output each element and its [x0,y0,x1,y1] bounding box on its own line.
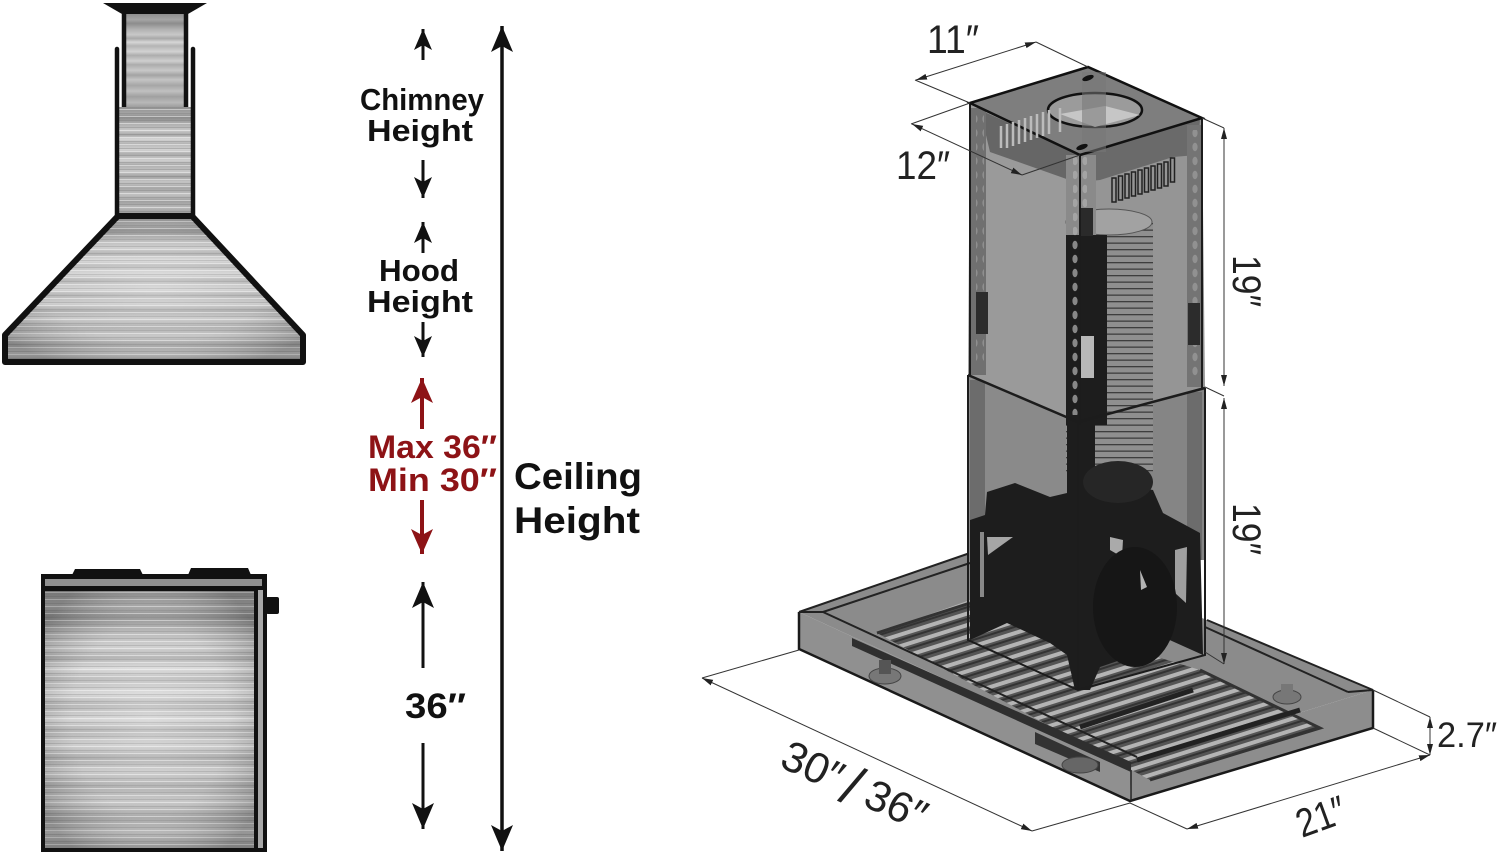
heading: ceiling height [514,456,642,541]
dimension: hood width 30/36 inches [702,650,1130,848]
text: clearance range: Min 30″ [368,462,497,498]
control panel [1035,732,1100,772]
range knob [266,597,279,614]
chimney outline [968,103,1205,690]
heading: ceiling height: Height [514,500,640,541]
range top band [41,574,267,589]
diagram: island hood isometric [799,67,1373,801]
text: clearance range [368,429,497,498]
dimension: lower chimney 19 inches: 19″ [1224,503,1268,555]
dimension: hood depth 21 inches: 21″ [1290,788,1352,846]
arrow: clearance up [420,378,424,429]
dimension: depth 12 inches: 12″ [896,144,950,188]
blower motor assembly [970,422,1203,690]
arrow: range height down [422,743,424,829]
grease filters [877,600,1320,780]
dimension: upper chimney 19 inches [1202,118,1268,386]
icon: chimney range hood [5,3,303,362]
lower chimney section [119,107,191,214]
heading: chimney height [360,82,485,148]
arrow: chimney down [422,160,424,198]
dimension: depth 12 inches [896,103,1080,188]
chimney top panel [970,67,1202,155]
front rail [799,612,1137,772]
dimension: hood width 30/36 inches: 30″ [774,732,851,802]
hood canopy [5,216,303,362]
heading: hood height [367,253,473,319]
range body [41,589,267,852]
flexible duct [1066,209,1153,472]
text: range height 36 inches: 36″ [405,687,466,726]
arrow: chimney up [422,29,424,60]
lower chimney panels [968,375,1205,560]
arrow: ceiling height [500,26,504,851]
heading: hood height: Height [367,284,473,319]
canopy tray [799,538,1373,801]
heading: chimney height: Height [367,113,473,148]
arrow: clearance down [420,500,424,554]
heading: chimney height: Chimney [360,82,485,117]
arrow: hood down [422,322,424,357]
icon: kitchen range [41,568,279,852]
hood chimney cap [103,3,207,14]
dimension: lower chimney 19 inches [1205,387,1268,664]
mounting feet [869,660,1301,773]
dimension: hood width 30/36 inches: / [832,754,873,818]
dimension: width 11 inches [915,18,1088,103]
dimension: canopy height 2.7 inches: 2.7″ [1437,716,1497,755]
dimension: upper chimney 19 inches: 19″ [1224,255,1268,307]
heading: hood height: Hood [379,253,459,288]
arrow: range height up [422,582,424,668]
upper chimney section [126,14,184,108]
dimension: width 11 inches: 11″ [927,18,979,62]
heading: ceiling height: Ceiling [514,456,642,497]
burner knobs on top [72,568,251,575]
chimney upper panels [968,103,1205,425]
side vent slots [1112,158,1174,202]
text: clearance range: Max 36″ [368,429,497,465]
dimension: canopy height 2.7 inches [1373,690,1497,755]
dimension: hood width 30/36 inches: 36″ [857,770,935,841]
arrow: hood up [422,222,424,253]
central perforated column [1066,155,1107,425]
dimension: hood depth 21 inches [1130,728,1430,846]
